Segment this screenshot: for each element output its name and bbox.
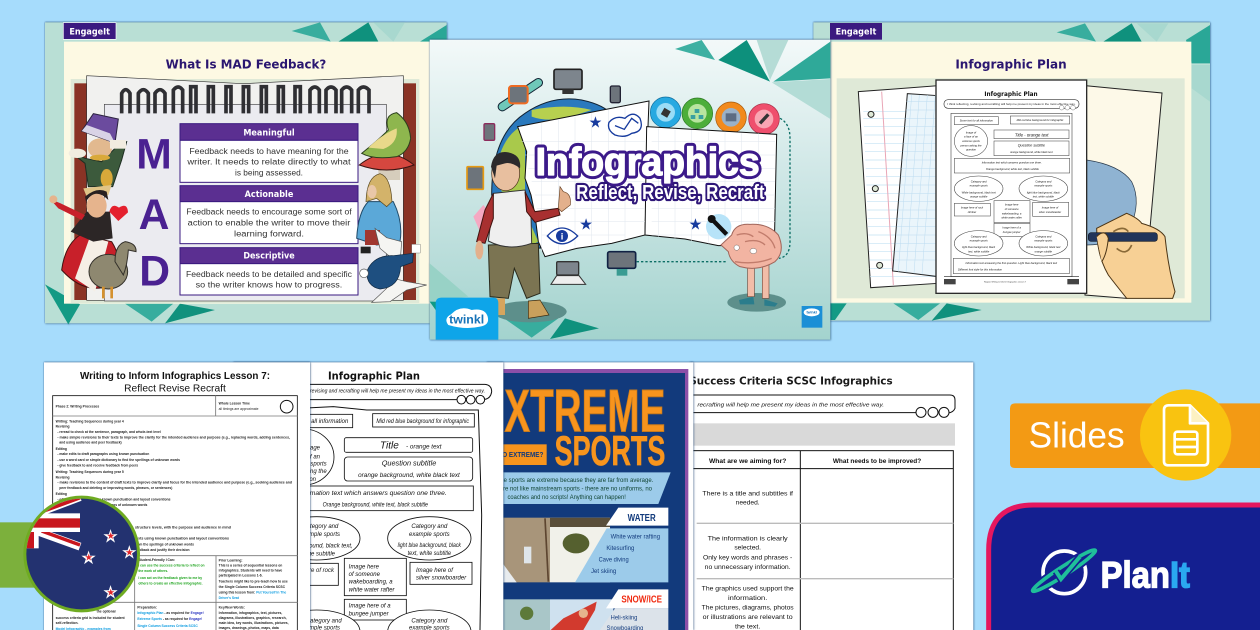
table: lesson plan <box>53 396 297 630</box>
plan handwritten text: Image <box>303 446 321 452</box>
plan handwritten text: text, white subtitle <box>408 551 452 557</box>
table: lesson plan: the Single Column Success Criteria SCSC <box>219 585 286 589</box>
card: Meaningful <box>180 124 358 182</box>
worksheet: Infographic Plan sheet: Different font style for this information <box>958 267 1003 271</box>
heading: Success Criteria: Success Criteria SCSC Infographics <box>689 374 893 387</box>
panel: slide What Is MAD Feedback <box>45 22 447 324</box>
worksheet: Infographic Plan sheet: Orange background, white text, black subtitle <box>986 167 1039 171</box>
worksheet: Infographic Plan sheet: White background, black text <box>1026 245 1061 249</box>
logo: twinkl: twinkl <box>449 312 484 326</box>
illustration: Alice <box>357 174 401 253</box>
illustration: brain character <box>721 224 786 312</box>
icon: wrench <box>706 214 731 239</box>
table: success criteria: There is a title and subtitles if <box>702 491 793 497</box>
illustration: torn notebook pages: ★ <box>688 217 702 234</box>
table: lesson plan: Prior Learning: <box>219 558 243 562</box>
worksheet: Infographic Plan sheet: example sports <box>1034 184 1053 188</box>
panel: Extreme Sports poster <box>479 362 693 630</box>
illustration: cream paper and blue blob <box>1085 86 1162 298</box>
table: success criteria: The information is clearly <box>708 536 788 542</box>
logo: twinkl badge: twinkl <box>806 311 817 315</box>
table: lesson plan: Key/New Words: <box>219 606 245 610</box>
plan handwritten text: wakeboarding, a <box>349 580 393 586</box>
table: lesson plan: and using audience and peer feedback) <box>59 441 122 445</box>
card: Meaningful: writer. It needs to relate directly to what <box>186 158 352 167</box>
worksheet: Infographic Plan sheet: bungee jumper <box>1003 230 1021 234</box>
plan handwritten text: background, black text, <box>291 543 353 549</box>
card: Descriptive: Feedback needs to be detailed and specific <box>186 270 352 279</box>
table: lesson plan: feedback and justify their decision <box>135 548 190 552</box>
worksheet: Infographic Plan sheet: orange subtitle <box>970 195 988 199</box>
reflection sentence bubble: revising and recrafting will help me present my ideas in the most effective way. <box>310 389 485 395</box>
illustration: badges <box>650 97 779 134</box>
table: lesson plan: - use a word card or simple dictionary to find the spellings of unknown words <box>57 458 180 462</box>
worksheet: Infographic Plan sheet: Image here <box>1005 203 1019 207</box>
illustration: Dodo <box>89 242 136 298</box>
tag: why so extreme: SO EXTREME? <box>498 450 544 459</box>
worksheet: Infographic Plan sheet: silver snowboarder <box>1039 210 1061 214</box>
plan handwritten text: of an <box>307 454 321 460</box>
worksheet: Infographic Plan sheet: question <box>966 148 977 152</box>
worksheet: Infographic Plan sheet: a face of an <box>964 135 978 139</box>
section: Snow and Ice <box>487 589 668 630</box>
table: lesson plan: success criteria grid is included for student <box>56 616 126 620</box>
plan handwritten text: Image here <box>349 564 380 570</box>
table: lesson plan: - make revisions to the content of draft texts to improve clarity and focus for the intended audience and purpose (e.g., seeking audience and <box>57 481 292 485</box>
table: lesson plan: infographics. Students will need to have <box>219 568 282 572</box>
plan handwritten text: Category and <box>411 618 448 624</box>
reflection sentence bubble <box>690 395 955 417</box>
table: lesson plan: - reread to check at the sentence, paragraph, and whole-text level <box>57 430 161 434</box>
plan handwritten text: - orange text <box>406 444 442 451</box>
table: lesson plan: Revising <box>56 475 70 479</box>
reflection sentence bubble <box>267 384 492 404</box>
plan handwritten text: example sports <box>299 532 340 538</box>
dotted connector <box>637 118 790 262</box>
illustration: globe <box>492 99 612 248</box>
worksheet: Infographic Plan sheet: Category and <box>1035 179 1052 183</box>
flag circle: ★ <box>121 542 138 563</box>
table: lesson plan: Editing <box>56 492 67 496</box>
worksheet: Infographic Plan sheet: Mid red blue background for infographic <box>1017 118 1064 122</box>
table: lesson plan: structure levels, with the purpose and audience in mind <box>135 525 231 529</box>
table: lesson plan: This is a series of sequential lessons on <box>219 564 282 568</box>
card: Meaningful: Meaningful <box>243 129 295 139</box>
plan handwritten text <box>274 419 469 630</box>
table: lesson plan: Editing <box>56 447 67 451</box>
worksheet: Infographic Plan sheet: of someone <box>1005 207 1019 211</box>
table: success criteria: What are we aiming for? <box>709 459 787 465</box>
plan handwritten text: Image here of <box>416 568 454 574</box>
table: lesson plan: Phase 2: Writing Processes <box>56 404 99 408</box>
table: lesson plan: peer feedback and deleting or improving words, phrases, or sentences) <box>59 486 172 490</box>
worksheet: Infographic Plan sheet: example sports <box>970 184 988 188</box>
section: Water: Cave diving <box>599 557 629 564</box>
table: lesson plan: the optional <box>97 610 116 614</box>
table: success criteria: What needs to be improved? <box>833 459 922 465</box>
table: lesson plan: Writing: Teaching Sequences during year 5 <box>56 470 124 474</box>
plan boxes <box>267 414 474 630</box>
section: Water: White water rafting <box>611 534 660 541</box>
subtitle text: Reflect, Revise, Recraft <box>576 182 765 204</box>
illustration: Mad Hatter <box>69 114 127 197</box>
illustration: White Rabbit <box>360 228 427 302</box>
worksheet: Infographic Plan sheet: Image here of a <box>1002 226 1021 230</box>
icon: cloud network <box>608 114 641 136</box>
panel: title slide Infographics <box>430 40 830 340</box>
plan handwritten text: Image here of rock <box>284 568 335 574</box>
table: lesson plan: Whole Lesson Time <box>219 401 250 405</box>
letter M: M <box>136 130 172 178</box>
table: lesson plan: Teachers might like to pre-teach how to use <box>219 580 288 584</box>
table: success criteria: selected. <box>734 546 761 552</box>
card: Actionable: action to enable the writer to move their <box>188 218 351 227</box>
worksheet: Infographic Plan sheet: Image here of <box>1042 205 1058 209</box>
plan handwritten text: of someone <box>349 572 381 578</box>
flag circle: ★ <box>102 582 119 603</box>
grey bar <box>690 423 955 446</box>
intro banner <box>485 472 671 504</box>
table: lesson plan: Writing: Teaching Sequences during year 4 <box>56 420 124 424</box>
logo: twinkl badge <box>802 306 822 328</box>
plan handwritten text: white water rafter <box>349 587 396 593</box>
title text: Infographics <box>536 140 760 184</box>
plan handwritten text: Question subtitle <box>382 459 436 468</box>
table: lesson plan: Single Column Success Criteria SCSC <box>137 624 198 628</box>
worksheet: Infographic Plan sheet: Image of <box>966 130 976 134</box>
section: Water <box>487 508 668 582</box>
badge: EngageIt <box>830 23 882 40</box>
card: Meaningful: Feedback needs to have meaning for the <box>189 147 349 156</box>
plan handwritten text: Mid red blue background for infographic <box>376 419 469 425</box>
section: Snow and Ice: Heli-skiing <box>611 614 638 621</box>
subheading: Reflect Revise Recraft: Reflect Revise Recraft <box>124 384 226 395</box>
table: lesson plan: - use a dictionary to find the spellings of unknown words <box>57 503 148 507</box>
worksheet: Infographic Plan sheet: Category and <box>1035 234 1052 238</box>
table: lesson plan: images, drawings, photos, maps, data <box>219 626 279 630</box>
letter D: D <box>139 248 170 296</box>
table: lesson plan: self-reflection. <box>56 621 78 625</box>
worksheet: Infographic Plan sheet: orange subtitle <box>1035 249 1053 253</box>
letter A: A <box>139 191 169 239</box>
worksheet: Infographic Plan sheet: light blue background, black <box>962 245 996 249</box>
table: lesson plan: the work of others. <box>138 569 168 573</box>
card: Actionable: Actionable <box>245 190 293 200</box>
table: lesson plan: others to create an effective infographic. <box>138 581 203 585</box>
worksheet: Infographic Plan sheet: Some text for all information <box>960 118 993 122</box>
illustration: graph paper <box>893 94 938 277</box>
illustration: lined paper <box>858 86 938 288</box>
worksheet: Infographic Plan sheet: White background, black text <box>962 190 996 194</box>
table: lesson plan: Extreme Sports - as required for Engage! <box>137 617 202 621</box>
heading: Infographic Plan: Infographic Plan <box>955 56 1067 71</box>
flag circle <box>20 496 140 612</box>
table: success criteria: or illustrations are relevant to <box>703 615 793 621</box>
icons: devices <box>467 69 636 284</box>
plan handwritten text: Information text which answers question one three. <box>296 490 447 497</box>
flag circle: ★ <box>106 531 115 541</box>
table: success criteria: no unnecessary information. <box>705 565 791 571</box>
plan handwritten text: orange background, white black text <box>358 473 460 479</box>
card: Descriptive: Descriptive <box>243 252 295 262</box>
plan handwritten text: bungee jumper <box>349 612 390 618</box>
worksheet: Infographic Plan sheet <box>936 80 1087 293</box>
worksheet: Infographic Plan sheet: Infographic Plan <box>984 91 1038 98</box>
worksheet: Infographic Plan sheet: extreme sports <box>962 139 980 143</box>
flag circle: ★ <box>84 553 93 563</box>
illustration: torn notebook pages: ★ <box>588 115 602 132</box>
table: success criteria: needed. <box>736 500 760 506</box>
table: lesson plan: Driver's Seat <box>219 596 240 600</box>
plan handwritten text: Orange background, white text, black subtitle <box>323 503 429 509</box>
flag circle: ★ <box>125 547 134 557</box>
plan outline <box>267 407 482 630</box>
illustration: Queen of Hearts <box>49 190 128 292</box>
plan handwritten text: example sports <box>409 532 450 538</box>
worksheet: Infographic Plan sheet: text, white subtitle <box>1033 195 1054 199</box>
worksheet: Infographic Plan sheet: I think reflecting, revising and recrafting will help me present my ideas in the most effective way. <box>947 103 1076 106</box>
table: success criteria <box>690 451 953 630</box>
label: Slides: Slides <box>1029 415 1125 455</box>
panel: lesson plan document <box>44 362 310 630</box>
table: lesson plan: I can act on the feedback given to me by <box>138 576 202 580</box>
plan handwritten text: Title <box>380 440 399 451</box>
table: lesson plan: participated in Lessons 1-6. <box>219 573 263 577</box>
worksheet: Infographic Plan sheet: Information text answering the first question. Light blue background, black text <box>965 261 1057 265</box>
plan handwritten text: light blue background, black <box>398 543 462 549</box>
plan handwritten text: question <box>293 477 317 483</box>
panel: PlanIt logo card <box>989 505 1260 630</box>
table: lesson plan: - make simple revisions to their texts to improve the clarity for the intended audience and purpose (e.g., replacing words, adding sentences, <box>57 435 290 439</box>
worksheet: Infographic Plan sheet: text, white subtitle <box>968 249 990 253</box>
section: Water: Kitesurfing <box>606 545 635 552</box>
illustration: Caterpillar on mushroom <box>359 113 414 180</box>
table: lesson plan: - give feedback to and receive feedback from peers <box>57 464 138 468</box>
icon: eye information: i <box>561 231 563 241</box>
table: lesson plan: - make edits to draft paragraphs using known punctuation <box>57 452 149 456</box>
table: lesson plan: Writing: Teaching Sequences during year 6 <box>56 515 124 519</box>
section: Snow and Ice: SNOW/ICE <box>621 594 662 605</box>
panel: Infographic Plan worksheet <box>233 362 503 630</box>
illustration: hand with pen <box>1088 213 1175 298</box>
table: lesson plan: Preparation: <box>137 606 157 610</box>
plan handwritten text: Image here of a <box>349 604 391 610</box>
badge: New Zealand flag <box>0 496 140 612</box>
worksheet: Infographic Plan sheet: Information text which answers question one three. <box>982 160 1042 164</box>
wordmark: PlanIt: PlanIt <box>1101 553 1190 595</box>
table: lesson plan: main idea, key words, illustrations, pictures, <box>219 621 289 625</box>
card: Actionable: learning forward. <box>234 230 304 239</box>
table: lesson plan: texts using known punctuation and layout conventions <box>135 537 229 541</box>
table: success criteria: Only key words and phrases - <box>703 556 792 562</box>
worksheet: Infographic Plan sheet: light blue background, black <box>1027 190 1060 194</box>
panel: slide Infographic Plan <box>813 22 1210 321</box>
flag circle: ★ <box>106 587 115 597</box>
plan handwritten text: Category and <box>411 524 448 530</box>
table: success criteria: The pictures, diagrams, photos <box>702 606 794 612</box>
table: lesson plan: Student-Friendly I Can: <box>138 558 175 562</box>
card: Descriptive <box>180 248 358 295</box>
flag circle: ★ <box>102 525 119 546</box>
panel: success criteria worksheet <box>689 362 973 630</box>
flag circle: ★ <box>80 547 97 568</box>
icon: planet check <box>1030 547 1098 595</box>
plan handwritten text: orange subtitle <box>296 551 336 557</box>
card: Descriptive: so the writer knows how to progress. <box>196 281 342 290</box>
section: Water: Jet skiing <box>591 568 617 575</box>
heading: SPORTS: SPORTS <box>555 427 665 474</box>
table: lesson plan: Revising <box>56 425 70 429</box>
table: lesson plan: diagrams, illustrations, graphics, research, <box>219 616 287 620</box>
heading: EXTREME: EXTREME <box>479 378 665 445</box>
title text highlight: Infographics <box>536 140 760 184</box>
intro banner: coaches and no scripts! Anything can happen! <box>507 495 626 501</box>
notebook illustration <box>71 76 419 303</box>
green tab <box>0 522 40 588</box>
plan handwritten text: sports <box>310 462 327 468</box>
badge: EngageIt: EngageIt <box>69 27 111 37</box>
table: success criteria: The graphics used support the <box>702 586 794 592</box>
reflection sentence bubble: recrafting will help me present my ideas in the most effective way. <box>697 402 884 408</box>
table: lesson plan: Information, infographics, text, pictures, <box>219 611 282 615</box>
icon: slides document <box>1164 405 1208 465</box>
worksheet: Infographic Plan sheet: climber <box>968 210 976 214</box>
heading: What Is MAD Feedback: What Is MAD Feedback? <box>166 56 326 71</box>
plan handwritten text: Category and <box>306 618 342 624</box>
table: lesson plan: - give and receive peer feedback <box>57 508 109 512</box>
badge: Slides <box>1010 389 1260 481</box>
worksheet: Infographic Plan sheet: Question subtitle <box>1018 143 1045 147</box>
worksheet: Infographic Plan sheet: example sports <box>970 239 988 243</box>
heading: lesson title: Writing to Inform Infographics Lesson 7: <box>80 371 270 382</box>
badge: EngageIt: EngageIt <box>836 28 877 38</box>
card: Actionable <box>180 186 358 244</box>
worksheet: Infographic Plan sheet: example sports <box>1034 239 1053 243</box>
worksheet: Infographic Plan sheet: white water rafter <box>1001 216 1022 220</box>
table: lesson plan: all timings are approximate <box>219 407 259 411</box>
plan handwritten text: Category and <box>302 524 339 530</box>
table: success criteria: information. <box>728 596 768 602</box>
card: Meaningful: is being assessed. <box>235 169 303 178</box>
worksheet: Infographic Plan sheet: Regular Writing to Inform Infographics Lesson 7 <box>984 280 1026 283</box>
illustration: boy <box>473 152 571 322</box>
worksheet: Infographic Plan sheet: orange background, white black text <box>1010 150 1053 154</box>
intro banner: Extreme sports are extreme because they are far from average. <box>485 478 654 484</box>
table: lesson plan: I can use the success criteria to reflect on <box>138 564 205 568</box>
tag: why so extreme <box>487 444 547 465</box>
worksheet: Infographic Plan sheet: wakeboarding, a <box>1002 211 1022 215</box>
logo: twinkl <box>436 298 498 340</box>
plan handwritten text: silver snowboarder <box>416 576 467 582</box>
worksheet: Infographic Plan sheet: Image here of rock <box>961 205 984 209</box>
illustration: torn notebook pages <box>518 101 777 257</box>
card: Actionable: Feedback needs to encourage some sort of <box>186 207 353 216</box>
plan handwritten text: asking the <box>299 469 327 475</box>
icon: eye information <box>547 228 578 244</box>
section: Water: WATER <box>628 513 656 524</box>
worksheet: Infographic Plan sheet: person asking the <box>960 143 982 147</box>
worksheet: Infographic Plan sheet: Category and <box>971 234 987 238</box>
heading: Infographic Plan: Infographic Plan <box>328 369 420 382</box>
table: lesson plan: Infographic Plan - as required for Engage! <box>137 611 204 615</box>
badge: EngageIt <box>63 23 116 39</box>
worksheet: Infographic Plan sheet: Title - orange text <box>1015 132 1049 137</box>
plan handwritten text: Some text for all information <box>274 419 349 425</box>
table: lesson plan: - edit paragraph texts using known punctuation and layout conventions <box>57 497 171 501</box>
worksheet: Infographic Plan sheet: Category and <box>971 179 987 183</box>
intro banner: They are not like mainstream sports - there are no uniforms, no <box>485 487 653 493</box>
table: lesson plan: using this lesson from: Put Yourself In The <box>219 591 286 595</box>
table: lesson plan: from the spellings of unknown words <box>135 542 194 546</box>
illustration: torn notebook pages: ★ <box>579 217 593 234</box>
